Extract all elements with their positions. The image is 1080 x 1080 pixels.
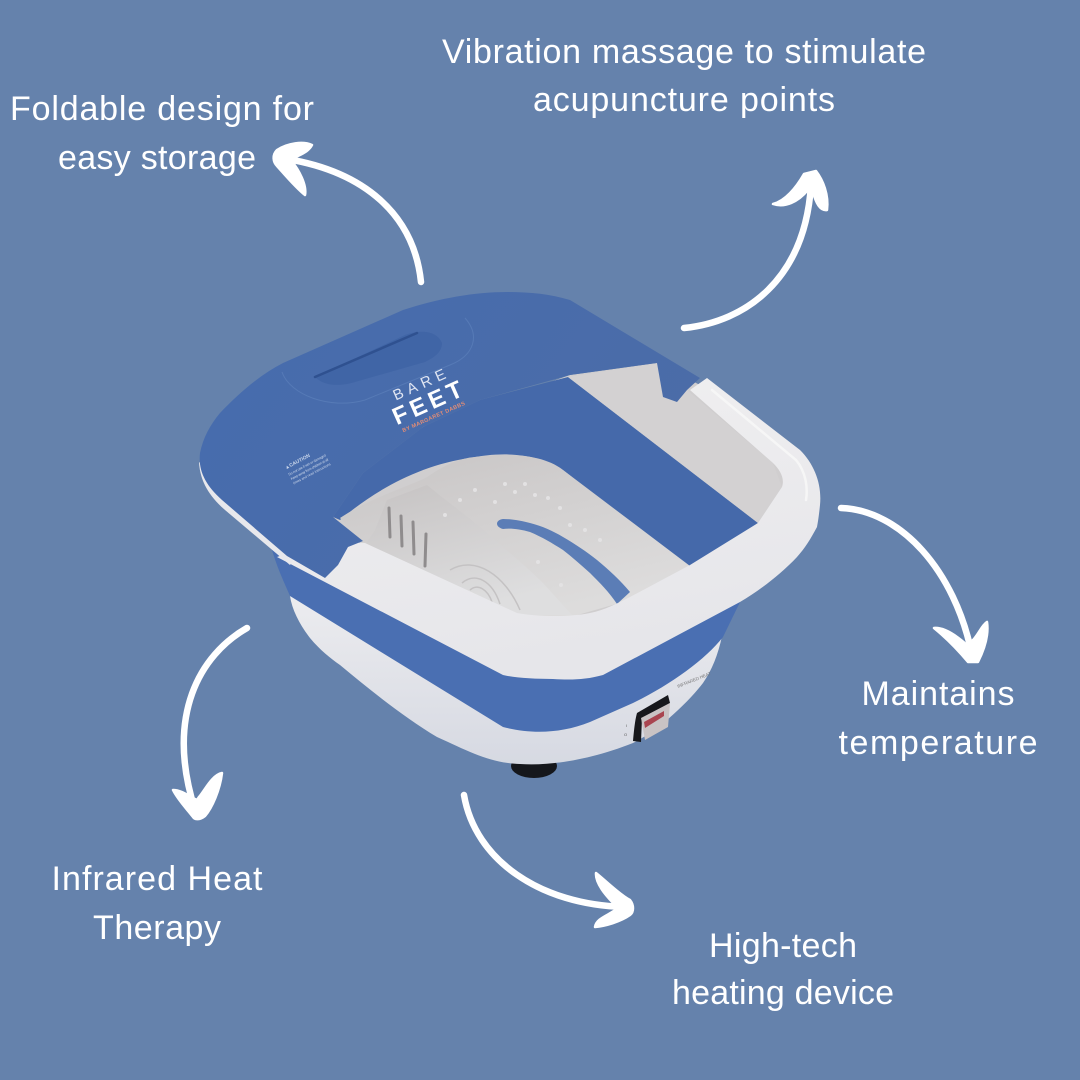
heading: foldable design: Foldable design for — [10, 90, 314, 128]
logo: FEET — [388, 376, 467, 431]
heading: maintains temperature: temperature — [838, 724, 1038, 762]
heading: infrared heat therapy: Infrared Heat — [52, 860, 263, 898]
floor massage dots — [443, 482, 602, 587]
rubber foot — [511, 754, 557, 778]
heading: foldable design — [10, 90, 314, 177]
control switch: O — [624, 732, 627, 737]
arrow: maintains temperature — [841, 508, 987, 662]
white lip under lid — [199, 462, 300, 565]
heading: high-tech heating device — [672, 927, 894, 1012]
lid handle recess — [315, 332, 442, 385]
logo — [382, 362, 469, 435]
rim highlight — [712, 390, 807, 500]
heading: vibration massage: Vibration massage to stimulate — [442, 33, 926, 71]
lower white base — [290, 596, 722, 764]
heading: high-tech heating device: heating device — [672, 974, 894, 1012]
caution label: times and read instructions — [292, 462, 332, 485]
white rim — [277, 378, 820, 680]
heading: infrared heat therapy — [52, 860, 263, 947]
heading: maintains temperature — [838, 675, 1038, 762]
control switch: I — [626, 723, 627, 728]
arrow: infrared heat — [173, 628, 247, 819]
caution label: Keep away from children at all — [290, 458, 329, 481]
caution label: Do not use if wet or damaged — [288, 453, 327, 477]
caution label: ▲CAUTION — [284, 453, 312, 471]
caution label — [284, 446, 332, 485]
arrow: high-tech device — [464, 795, 633, 927]
lid seam — [282, 318, 473, 403]
interior blue wall — [333, 377, 758, 570]
control switch: INFRARED HEAT — [677, 671, 712, 689]
blue lid — [200, 292, 700, 578]
arrow: vibration massage — [684, 171, 827, 328]
logo: BY MARGARET DABBS — [402, 401, 466, 434]
massage hump with ridges — [365, 485, 572, 615]
heading: vibration massage: acupuncture points — [533, 81, 835, 119]
control switch — [624, 671, 712, 742]
foot spa product — [199, 292, 820, 778]
blue floor strip — [497, 519, 630, 604]
basin back wall — [333, 363, 785, 625]
basin floor — [340, 455, 690, 620]
upper inner rim and grey wall — [568, 363, 782, 523]
heading: maintains temperature: Maintains — [862, 675, 1014, 713]
heading: high-tech heating device: High-tech — [709, 927, 857, 965]
heading: infrared heat therapy: Therapy — [93, 909, 221, 947]
logo: BARE — [390, 366, 449, 404]
blue collapsible band — [272, 550, 745, 732]
heading: foldable design: easy storage — [58, 139, 256, 177]
arrow: foldable design — [274, 143, 421, 282]
heading: vibration massage — [442, 33, 926, 119]
